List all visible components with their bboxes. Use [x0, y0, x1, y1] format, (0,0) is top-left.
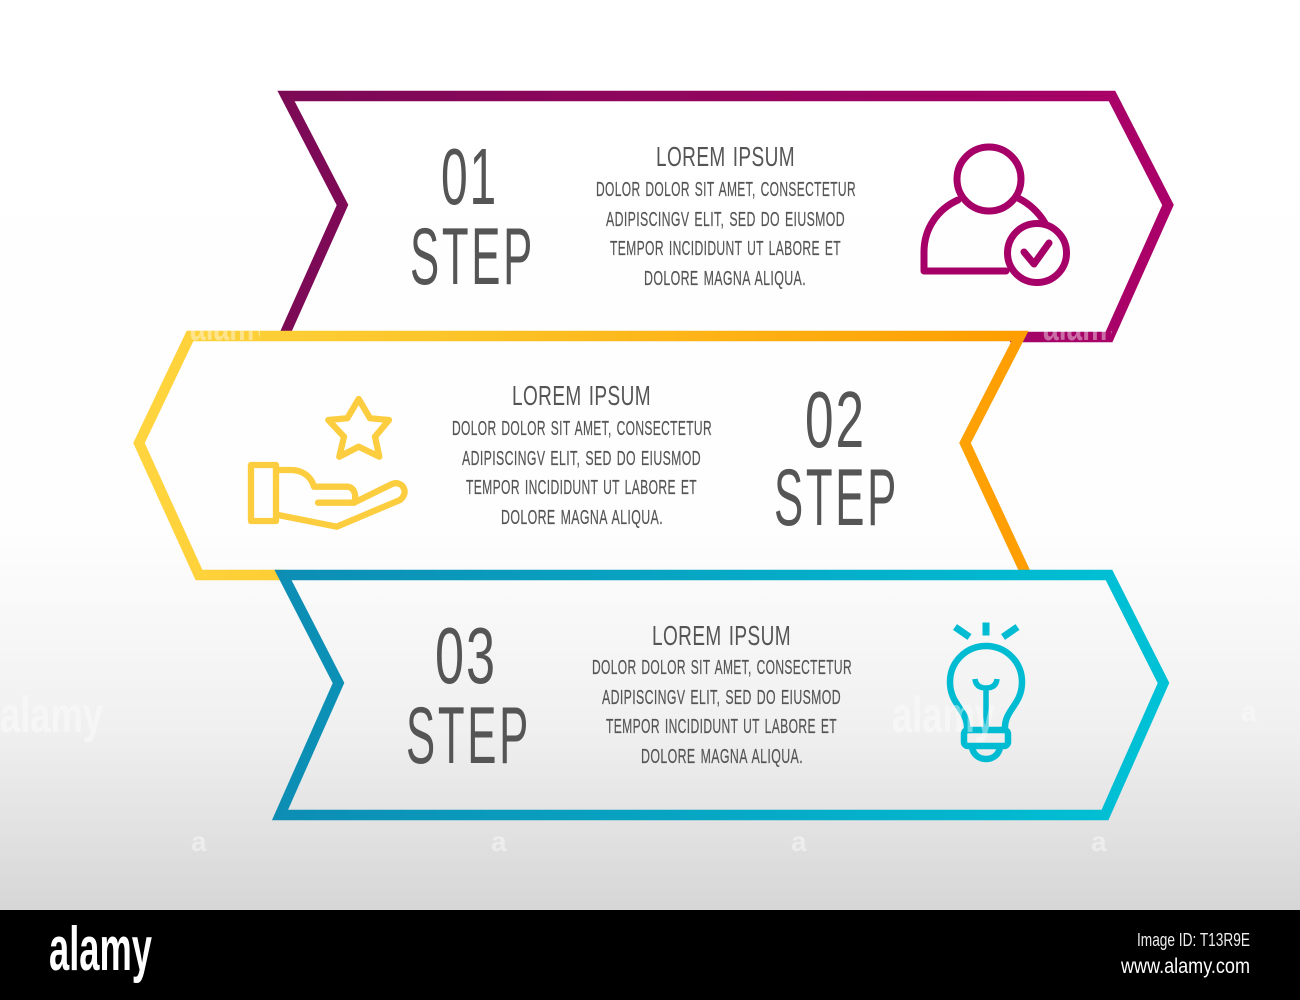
step 2 text block: TEMPOR INCIDIDUNT UT LABORE ET — [466, 477, 697, 499]
step 1 text block: ADIPISCINGV ELIT, SED DO EIUSMOD — [606, 209, 845, 231]
step 2 number — [774, 375, 899, 543]
watermarks: a — [491, 826, 507, 857]
step 1 number — [410, 132, 535, 302]
step 3 text block: DOLORE MAGNA ALIQUA. — [641, 746, 803, 768]
alamy logo: alamy — [49, 915, 152, 984]
step 3 number — [406, 611, 531, 781]
step 3 text block: TEMPOR INCIDIDUNT UT LABORE ET — [606, 716, 837, 738]
panel: step 3 — [280, 575, 1164, 815]
website: www.alamy.com — [1120, 955, 1250, 978]
watermarks: alamy — [1043, 302, 1123, 349]
step 2 text block: DOLORE MAGNA ALIQUA. — [501, 507, 663, 529]
step 2 number: STEP — [774, 453, 899, 543]
step 1 text block: DOLORE MAGNA ALIQUA. — [644, 268, 806, 290]
step 3 text block: ADIPISCINGV ELIT, SED DO EIUSMOD — [602, 687, 841, 709]
arrow outline: step 2 — [139, 336, 1026, 575]
icon: light bulb — [950, 622, 1022, 759]
arrow outline: step 3 — [280, 575, 1164, 815]
step 1 number: STEP — [410, 212, 535, 302]
step 3 number: 03 — [435, 611, 497, 700]
icon: hand holding star — [251, 399, 405, 527]
step 1 text block: LOREM IPSUM — [656, 141, 795, 172]
watermarks: a — [191, 826, 207, 857]
watermarks: a — [1091, 826, 1107, 857]
watermarks: alamy — [190, 302, 270, 349]
watermarks: alamy — [0, 687, 103, 743]
panel: step 1 — [283, 96, 1168, 338]
icon: person with check badge — [924, 147, 1066, 282]
step 2 text block: DOLOR DOLOR SIT AMET, CONSECTETUR — [452, 418, 712, 440]
watermarks — [190, 331, 1112, 851]
watermarks: a — [1241, 696, 1257, 727]
step 2 number: 02 — [805, 375, 866, 464]
step 1 text block: DOLOR DOLOR SIT AMET, CONSECTETUR — [596, 179, 856, 201]
step 3 text block — [592, 620, 852, 768]
watermarks: alamy — [892, 687, 995, 743]
step 1 text block: TEMPOR INCIDIDUNT UT LABORE ET — [610, 238, 841, 260]
image id: Image ID: T13R9E — [1137, 930, 1250, 950]
step 2 text block — [452, 380, 712, 529]
step 2 text block: ADIPISCINGV ELIT, SED DO EIUSMOD — [462, 448, 701, 470]
arrow outline: step 1 — [283, 96, 1168, 338]
footer bar — [0, 910, 1300, 1000]
watermarks: a — [791, 826, 807, 857]
step 3 text block: LOREM IPSUM — [652, 620, 791, 651]
step 3 text block: DOLOR DOLOR SIT AMET, CONSECTETUR — [592, 657, 852, 679]
step 3 number: STEP — [406, 691, 531, 781]
panel: step 2 — [139, 336, 1026, 575]
step 1 text block — [596, 141, 856, 290]
step 1 number: 01 — [441, 132, 498, 221]
step 2 text block: LOREM IPSUM — [512, 380, 651, 411]
